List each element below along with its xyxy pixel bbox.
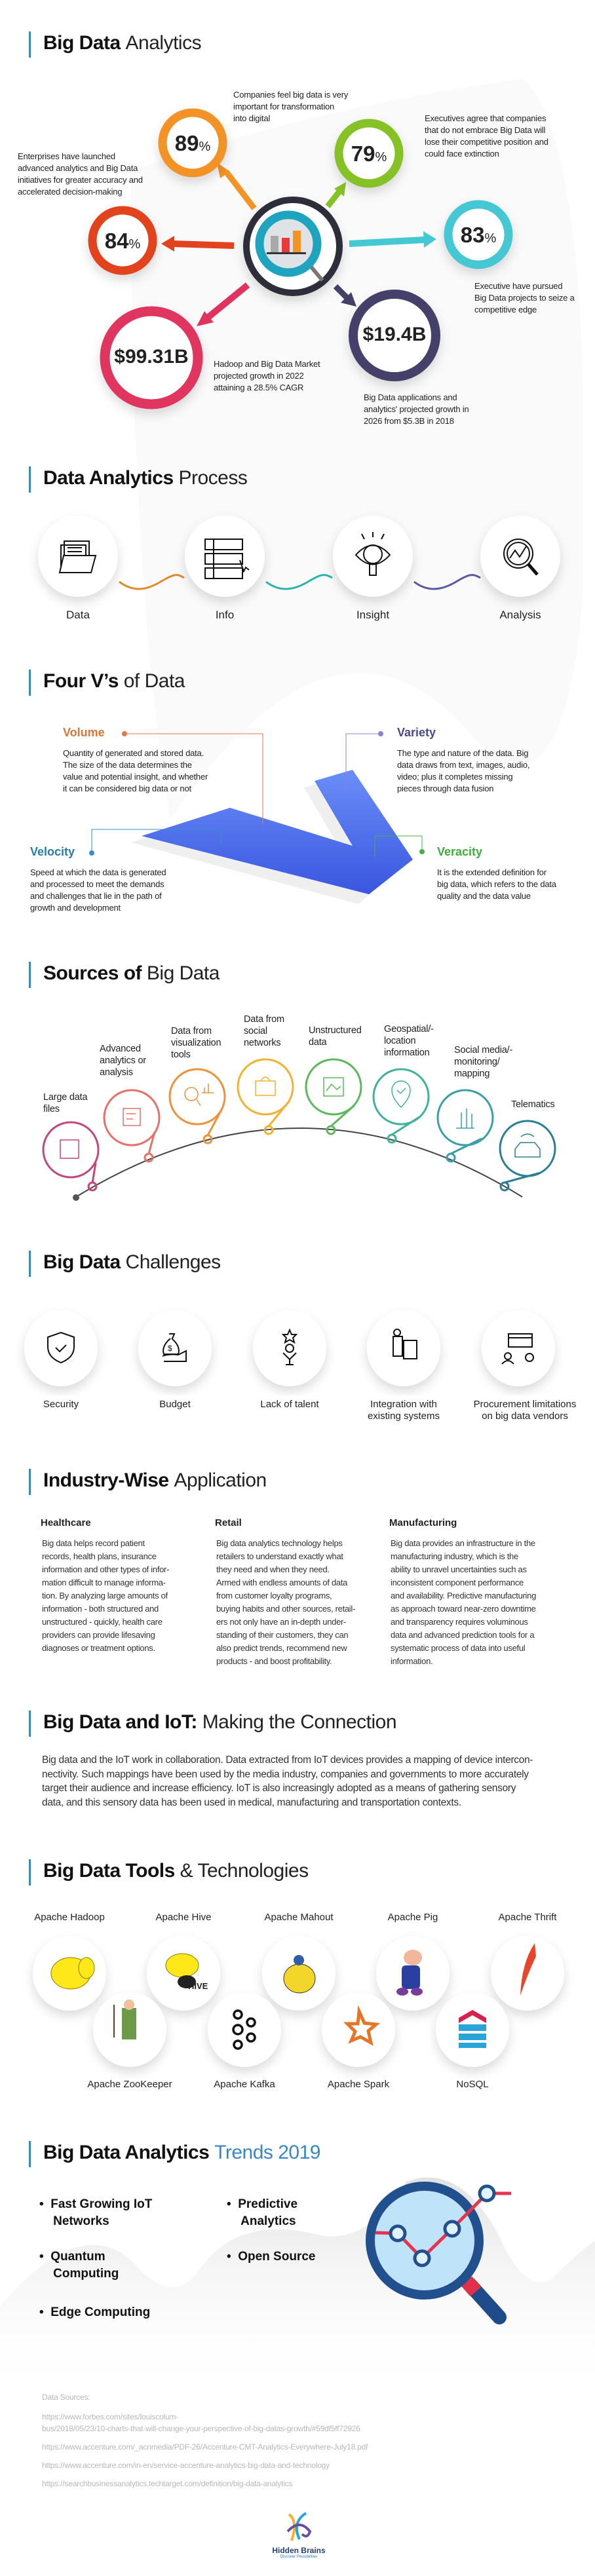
panel: Healthcare [41, 1517, 169, 1653]
Volume: it can be considered big data or not [63, 784, 191, 793]
trends list: • Edge Computing [39, 2305, 150, 2319]
Variety: pieces through data fusion [397, 784, 493, 793]
text: applications [364, 392, 469, 426]
label: Unstructured data: Unstructured [309, 1025, 362, 1036]
title: Industry-Wise Application: Industry-Wise Application [43, 1469, 267, 1491]
Veracity: It is the extended definition for [437, 867, 547, 877]
title: Four V's of Data: Four V’s of Data [43, 670, 185, 692]
text: companies: into digital [233, 113, 270, 123]
panel: Healthcare: information and other types of infor- [42, 1564, 169, 1574]
label: Data from visualization tools: Data from [171, 1026, 212, 1036]
stat 83%: 83% [461, 223, 496, 247]
text: executives agree: lose their competitive position and [425, 137, 548, 147]
label: Integration: Integration with [370, 1399, 437, 1410]
labels bottom: Apache ZooKeeper [87, 2079, 172, 2090]
text: companies [233, 90, 349, 123]
tools grid: Apache Pig [388, 1912, 438, 1923]
panel: Retail: buying habits and other sources, retail- [216, 1604, 355, 1614]
icon: eye insight [356, 532, 390, 575]
Veracity: quality and the data value [437, 891, 531, 901]
text: executives agree: that do not embrace Big Data will [425, 125, 545, 135]
tools grid: Apache Spark [328, 2079, 389, 2090]
Velocity: and processed to meet the demands [30, 879, 164, 889]
Veracity: Veracity [437, 845, 482, 858]
text: IoT paragraph [42, 1754, 533, 1808]
panel: Manufacturing: Big data provides an infrastructure in the [391, 1538, 535, 1548]
panel: Manufacturing: systematic process of data into useful [391, 1643, 525, 1653]
panel: Manufacturing: data and advanced prediction tools for a [391, 1630, 534, 1640]
title: Big Data and IoT: Big Data and IoT: Making the Connection [43, 1711, 396, 1733]
Volume [63, 726, 208, 793]
Veracity: big data, which refers to the data [437, 879, 556, 889]
data sources: https://www.accenture.com/_acnmedia/PDF-26/Accenture-CMT-Analytics-Everywhere-July18.pdf [42, 2442, 368, 2452]
stat $99.31B: $99.31B [114, 346, 189, 368]
challenges row [21, 1327, 576, 1422]
text: IoT paragraph: nectivity. Such mappings have been used by the media industry, companies and governments to more accurately [42, 1769, 529, 1780]
title: Big Data Challenges: Big Data Challenges [43, 1251, 221, 1273]
icon: trends magnifier [366, 2182, 511, 2324]
text: hadoop: attaining a 28.5% CAGR [214, 383, 303, 392]
data sources [42, 2393, 368, 2488]
Veracity [437, 845, 556, 901]
Velocity: and challenges that lie in the path of [30, 891, 162, 901]
trends list: • Open Source [227, 2250, 315, 2263]
panel: Healthcare: tion. By analyzing large amounts of [42, 1591, 168, 1601]
label: Security: Security [43, 1399, 79, 1410]
label: Procurement [474, 1399, 576, 1422]
text: applications: 2026 from $5.3B in 2018 [364, 416, 454, 426]
logos: HIVE [188, 1981, 208, 1991]
label: Geospatial: Geospatial/- [384, 1024, 434, 1034]
label: Advanced analytics: analysis [100, 1067, 133, 1078]
text: executive pursued: Executive have pursued [474, 281, 562, 291]
Volume: value and potential insight, and whether [63, 772, 208, 782]
text: enterprises: Enterprises have launched [18, 151, 115, 161]
data sources: Data Sources: [42, 2393, 90, 2402]
panel: Healthcare: information - both structured and [42, 1604, 159, 1614]
tools grid [29, 1912, 567, 2090]
logo: Hidden Brains [272, 2512, 326, 2559]
Variety: Variety [397, 726, 436, 739]
logos [51, 1943, 536, 2049]
label: Procurement: on big data vendors [482, 1411, 568, 1422]
panel: Manufacturing: ability to unravel uncertainties such as [391, 1564, 527, 1574]
panel: Healthcare: unstructured - quickly, health care [42, 1617, 163, 1627]
trends list: • Fast Growing IoT [39, 2197, 152, 2211]
trends list [39, 2197, 315, 2319]
label: Integration: existing systems [368, 1411, 440, 1422]
Volume: Volume [63, 726, 105, 739]
panel: Manufacturing: manufacturing industry, which is the [391, 1551, 518, 1561]
label: Geospatial [384, 1024, 434, 1058]
data sources: https://www.forbes.com/sites/louiscolum- [42, 2412, 178, 2421]
label: Geospatial: location [384, 1036, 415, 1046]
title: Big Data Analytics: Big Data Analytics [43, 32, 201, 54]
trends list: • Quantum [39, 2250, 106, 2263]
trends list: Analytics [240, 2214, 296, 2228]
tools grid: Apache Thrift [499, 1912, 556, 1923]
label: Data from social networks: social [244, 1026, 267, 1036]
icon: analysis magnifier [504, 539, 537, 575]
text: enterprises: accelerated decision-making [18, 187, 122, 197]
text: companies: Companies feel big data is very [233, 90, 348, 100]
label: Data: Data [66, 609, 90, 621]
Velocity: Speed at which the data is generated [30, 867, 166, 877]
data sources: https://searchbusinessanalytics.techtarget.com/definition/big-data-analytics [42, 2479, 292, 2488]
panel: Retail: products - and boost profitability. [216, 1656, 332, 1666]
panel: Healthcare: Healthcare [41, 1517, 91, 1528]
label: Advanced analytics: Advanced [100, 1044, 141, 1054]
process diagram [35, 532, 564, 621]
panel: Retail: Big data analytics technology helps [216, 1538, 343, 1548]
label: Advanced analytics: analytics or [100, 1055, 146, 1066]
icon: documents [60, 541, 96, 573]
logo: Hidden Brains: Hidden Brains [272, 2546, 326, 2555]
panel: Healthcare: providers can provide lifesaving [42, 1630, 155, 1640]
Variety: video; plus it completes missing [397, 772, 512, 782]
text: hadoop: Hadoop and Big Data Market [214, 359, 320, 369]
Variety: The type and nature of the data. Big [397, 748, 528, 758]
text: IoT paragraph: data, and this sensory data has been used in medical, manufacturing and transportation contexts. [42, 1797, 461, 1808]
title: Data Analytics Process: Data Analytics Process [43, 467, 247, 489]
text: IoT paragraph: target their audience and increase efficiency. IoT is also increasingly adopted as a means of gathering sensory [42, 1783, 516, 1794]
stat $19.4B: $19.4B [363, 324, 426, 345]
text: executive pursued [474, 281, 575, 314]
label: Geospatial: information [384, 1048, 430, 1058]
tools grid: Apache Kafka [214, 2079, 275, 2090]
stat 89%: 89% [175, 131, 210, 155]
text: executives agree: Executives agree that companies [425, 113, 546, 123]
trends list: Networks [53, 2214, 109, 2228]
label: Social media: monitoring/ [454, 1057, 500, 1067]
panel: Retail: Retail [215, 1517, 242, 1528]
labels top: Apache Hadoop [34, 1912, 105, 1923]
text: enterprises [18, 151, 143, 197]
logo: Hidden Brains: Discover Possibilities [280, 2555, 317, 2559]
label: Data from social networks [244, 1014, 284, 1048]
label: Social media: Social media/- [454, 1045, 512, 1055]
panel: Healthcare: Big data helps record patient [42, 1538, 145, 1548]
label: Lack of talent: Lack of talent [260, 1399, 319, 1410]
icon: info list [205, 539, 249, 578]
label: Advanced analytics [100, 1044, 146, 1078]
text: executives agree: could face extinction [425, 149, 499, 159]
panel: Retail: retailers to understand exactly what [216, 1551, 343, 1561]
panel: Manufacturing: Manufacturing [389, 1517, 457, 1528]
label: Unstructured data [309, 1025, 362, 1048]
panel: Manufacturing: information. [391, 1656, 432, 1666]
panel: Manufacturing: as approach toward near-zero downtime [391, 1604, 536, 1614]
label: Data from visualization tools: visualization [171, 1038, 221, 1048]
text: enterprises: advanced analytics and Big Data [18, 163, 138, 173]
label: Procurement: Procurement limitations [474, 1399, 576, 1410]
stat 84%: 84% [105, 229, 140, 253]
Velocity [30, 845, 166, 913]
text: companies: important for transformation [233, 102, 334, 111]
text: executive pursued: Big Data projects to seize a [474, 293, 575, 303]
trends list: Computing [53, 2267, 119, 2281]
label: Unstructured data: data [309, 1037, 326, 1048]
Variety [397, 726, 529, 793]
tools grid: Apache Mahout [264, 1912, 334, 1923]
data sources: https://www.accenture.com/in-en/service-accenture-analytics-big-data-and-technology [42, 2461, 330, 2470]
sources arc diagram [42, 1014, 556, 1201]
trends list: • Predictive [227, 2197, 298, 2211]
text: hadoop: projected growth in 2022 [214, 371, 304, 381]
label: Data from social networks: networks [244, 1038, 280, 1048]
panel: Retail: they need and when they need. [216, 1564, 330, 1574]
panel: Healthcare: diagnoses or treatment options. [42, 1643, 155, 1653]
stat 79%: 79% [351, 142, 387, 166]
panel: Retail: standing of their customers, they can [216, 1630, 348, 1640]
Variety: data draws from text, images, audio, [397, 760, 529, 770]
label: Insight: Insight [356, 609, 389, 621]
text: applications: Big Data applications and [364, 392, 457, 402]
title: Sources of Big Data: Sources of Big Data [43, 962, 220, 984]
panel: Healthcare: mation difficult to manage informa- [42, 1578, 166, 1587]
label: Budget: Budget [159, 1399, 191, 1410]
arrows [161, 162, 436, 326]
text: executive pursued: competitive edge [474, 305, 537, 314]
Velocity: Velocity [30, 845, 75, 858]
challenges row: $ [168, 1344, 172, 1353]
label: Data from social networks: Data from [244, 1014, 284, 1025]
label: Social media: mapping [454, 1069, 489, 1079]
text: applications: analytics' projected growth in [364, 404, 469, 414]
tools grid: Apache Hive [155, 1912, 212, 1923]
text: IoT paragraph: Big data and the IoT work in collaboration. Data extracted from IoT devices provides a mapping of device intercon- [42, 1754, 533, 1766]
panel: Retail: ers not only have an in-depth under- [216, 1617, 346, 1627]
label: Integration [368, 1399, 440, 1422]
four Vs diagram [30, 726, 556, 913]
panel: Manufacturing: and transparency requires voluminous [391, 1617, 528, 1627]
panel: Retail: from customer loyalty programs, [216, 1591, 332, 1601]
panel: Retail: also predict trends, recommend new [216, 1643, 347, 1653]
label: Data from visualization tools [171, 1026, 221, 1060]
label: Large data files [43, 1092, 88, 1114]
panel: Manufacturing [389, 1517, 536, 1666]
label: Social media [454, 1045, 512, 1079]
panel: Retail: Armed with endless amounts of data [216, 1578, 347, 1587]
label: Telematics: Telematics [511, 1099, 554, 1110]
Velocity: growth and development [30, 903, 121, 913]
label: Data from visualization tools: tools [171, 1050, 191, 1060]
tools grid: NoSQL [456, 2079, 489, 2090]
text: hadoop [214, 359, 320, 392]
label: Analysis: Analysis [499, 609, 541, 621]
title: Big Data Tools & Technologies: Big Data Tools & Technologies [43, 1860, 309, 1882]
panel: Manufacturing: inconsistent component performance [391, 1578, 524, 1587]
data sources: bus/2018/05/23/10-charts-that-will-change-your-perspective-of-big-datas-growth/#59df5ff72926 [42, 2424, 360, 2433]
center magnifier icon [259, 215, 322, 280]
text: executives agree [425, 113, 548, 159]
panel: Healthcare: records, health plans, insurance [42, 1551, 157, 1561]
Volume: The size of the data determines the [63, 760, 192, 770]
label: Info: Info [216, 609, 234, 621]
text: enterprises: initiatives for greater accuracy and [18, 175, 143, 185]
title: Big Data Analytics Trends 2019: Big Data Analytics Trends 2019 [43, 2142, 320, 2163]
label: Large data files: Large data [43, 1092, 87, 1103]
panel: Manufacturing: and availability. Predictive manufacturing [391, 1591, 536, 1601]
label: Large data files: files [43, 1104, 60, 1114]
panel: Retail [215, 1517, 355, 1666]
stats diagram [85, 109, 516, 418]
Volume: Quantity of generated and stored data. [63, 748, 204, 758]
